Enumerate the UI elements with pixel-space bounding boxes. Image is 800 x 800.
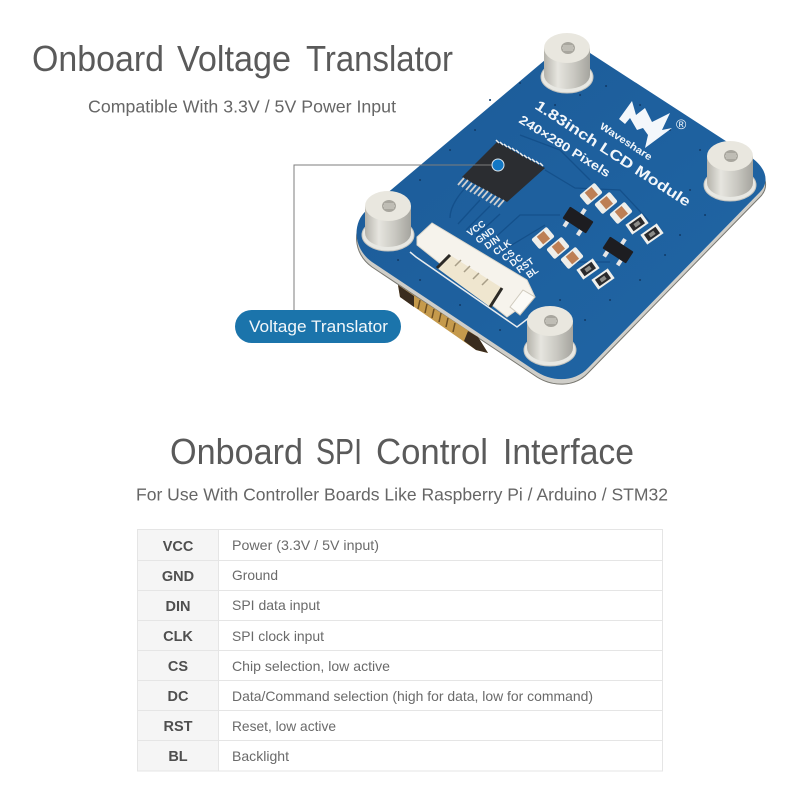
table row: CS xyxy=(168,658,390,675)
circuit board xyxy=(357,51,766,379)
title: Onboard Voltage Translator: Voltage xyxy=(177,38,291,79)
title: Onboard Voltage Translator: Translator xyxy=(306,38,453,79)
table row: DIN: SPI data input xyxy=(232,597,320,613)
capacitors xyxy=(531,183,633,269)
via dots xyxy=(398,83,720,330)
table row: GND: Ground xyxy=(232,567,278,583)
icon: Waveshare logo xyxy=(619,101,672,148)
board print: pin labels: BL xyxy=(524,265,541,281)
table row: VCC xyxy=(163,537,379,555)
table row: CLK: SPI clock input xyxy=(232,628,324,644)
product photo: LCD module board xyxy=(357,33,766,384)
icon: registered mark: ® xyxy=(676,116,687,132)
table row: CS: CS xyxy=(168,659,188,675)
board print: pin labels: DIN xyxy=(483,234,503,252)
board print: brand text: Waveshare xyxy=(597,121,654,163)
title: Onboard Voltage Translator xyxy=(32,38,453,79)
board print: pin labels xyxy=(465,219,541,281)
table row: RST xyxy=(164,718,336,735)
table row: DC: Data/Command selection (high for data, low for command) xyxy=(232,688,593,704)
subtitle: power input: Compatible With 3.3V / 5V Power Input xyxy=(88,96,396,116)
table row: DIN xyxy=(166,597,320,615)
table row: VCC: VCC xyxy=(163,539,194,555)
table row: VCC: Power (3.3V / 5V input) xyxy=(232,537,379,553)
table row: CLK xyxy=(163,628,324,645)
voltage translator chip xyxy=(458,140,545,207)
connector xyxy=(410,223,535,327)
table row: GND xyxy=(162,567,278,585)
callout pill: Voltage Translator: Voltage Translator xyxy=(249,318,389,336)
callout leader line xyxy=(294,165,498,311)
pinout table xyxy=(138,530,662,771)
table row: CS: Chip selection, low active xyxy=(232,658,390,674)
heading: Onboard SPI Control Interface: Control xyxy=(376,431,488,472)
table row: DC: DC xyxy=(168,689,189,705)
board print: pin labels: CS xyxy=(500,248,517,264)
board print: pin labels: DC xyxy=(508,252,525,269)
subtitle: controller boards: For Use With Controller Boards Like Raspberry Pi / Arduino / STM32 xyxy=(136,484,668,504)
board print: pin labels: VCC xyxy=(465,219,488,239)
board print: pin labels: GND xyxy=(474,225,497,247)
heading: Onboard SPI Control Interface xyxy=(170,431,634,472)
board print: resolution text: 240×280 Pixels xyxy=(516,113,613,180)
board print: pin labels: CLK xyxy=(491,238,514,258)
resistors xyxy=(576,213,664,290)
board print: pin labels: RST xyxy=(515,256,537,276)
heading: Onboard SPI Control Interface: SPI xyxy=(316,431,362,472)
copper traces xyxy=(450,135,650,262)
callout pill: Voltage Translator xyxy=(235,310,401,343)
metal back plate xyxy=(357,56,766,384)
table row: BL: BL xyxy=(168,749,188,765)
title: Onboard Voltage Translator: Onboard xyxy=(32,38,164,79)
board print: model text: 1.83inch LCD Module xyxy=(532,98,693,210)
table row: RST: Reset, low active xyxy=(232,718,336,734)
table row: GND: GND xyxy=(162,569,194,585)
metal standoffs xyxy=(362,33,756,366)
heading: Onboard SPI Control Interface: Interface xyxy=(503,431,634,472)
table row: BL xyxy=(168,748,289,765)
LCD flex cable xyxy=(398,285,488,353)
table row: CLK: CLK xyxy=(163,629,193,645)
table row: BL: Backlight xyxy=(232,748,289,764)
table row: RST: RST xyxy=(164,719,193,735)
heading: Onboard SPI Control Interface: Onboard xyxy=(170,431,303,472)
transistors xyxy=(559,201,637,269)
table row: DIN: DIN xyxy=(166,599,190,615)
callout marker dot xyxy=(492,159,504,171)
